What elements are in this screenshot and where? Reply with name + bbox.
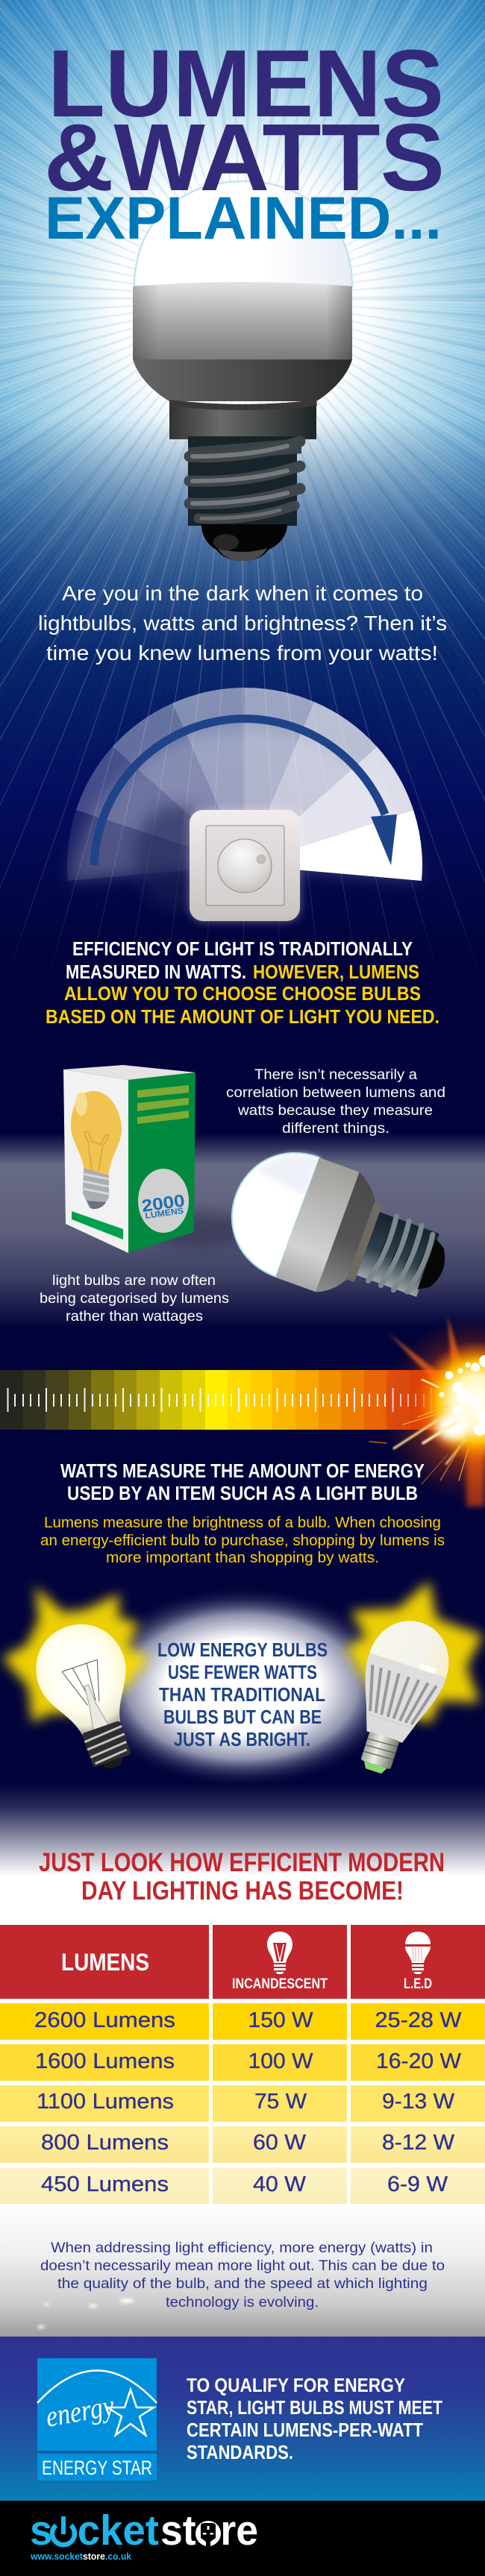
power icon in the o xyxy=(49,2516,78,2548)
grey panel with text xyxy=(0,2204,485,2337)
title line: LUMENS: LUMENS xyxy=(48,31,444,137)
row: 2600 lumens xyxy=(0,2003,485,2040)
paragraph: doesn’t necessarily mean more light out. This can be due to xyxy=(40,2258,445,2274)
stem xyxy=(78,1683,109,1731)
sparkles xyxy=(1,2240,134,2328)
low energy text: USE FEWER WATTS xyxy=(168,1661,317,1683)
box top face xyxy=(63,1065,195,1080)
glass xyxy=(24,1612,143,1743)
box badge: LUMENS xyxy=(145,1207,184,1221)
footer xyxy=(0,2501,485,2576)
correlation text: correlation between lumens and xyxy=(226,1085,445,1101)
explosion core xyxy=(416,1341,485,1463)
lumens explanation text: an energy-efficient bulb to purchase, shopping by lumens is xyxy=(40,1533,445,1549)
low energy text: LOW ENERGY BULBS xyxy=(157,1639,328,1661)
intro text xyxy=(38,582,447,665)
fan wedges xyxy=(67,688,422,881)
efficiency heading: ALLOW YOU TO CHOOSE CHOOSE BULBS xyxy=(64,982,421,1005)
row: 1100 lumens: 75 W xyxy=(254,2090,307,2114)
row: 450 lumens: 450 Lumens xyxy=(41,2173,169,2196)
paragraph: When addressing light efficiency, more energy (watts) in xyxy=(51,2240,433,2256)
fan glow xyxy=(69,729,421,881)
website: www.socket xyxy=(30,2551,84,2562)
efficiency heading: EFFICIENCY OF LIGHT IS TRADITIONALLY xyxy=(72,937,413,960)
floor bulb grey band xyxy=(276,1157,360,1292)
correlation text xyxy=(226,1067,445,1137)
background: light burst with rays xyxy=(0,0,485,970)
floor bulb collar xyxy=(346,1202,382,1282)
efficiency heading: HOWEVER, LUMENS xyxy=(253,961,419,983)
floor bulb taper xyxy=(316,1172,383,1301)
energy star text xyxy=(187,2374,442,2463)
dimmer switch xyxy=(190,810,300,921)
blue energy star panel xyxy=(0,2337,485,2501)
efficiency heading: MEASURED IN WATTS. xyxy=(66,961,246,983)
dial arrow xyxy=(94,719,397,865)
energy star logo xyxy=(37,2358,157,2481)
white table background xyxy=(0,1876,485,2208)
table xyxy=(0,1925,485,2205)
low energy text: BULBS BUT CAN BE xyxy=(163,1706,322,1728)
tip xyxy=(362,1761,387,1775)
energy star logo: ENERGY STAR xyxy=(42,2457,152,2479)
efficiency heading: BASED ON THE AMOUNT OF LIGHT YOU NEED. xyxy=(46,1005,439,1028)
row: 2600 lumens: 150 W xyxy=(248,2008,313,2032)
row: 1100 lumens xyxy=(0,2085,485,2122)
watts heading: WATTS MEASURE THE AMOUNT OF ENERGY xyxy=(60,1460,425,1482)
spectrum tick marks xyxy=(7,1388,448,1412)
floor bulb dome xyxy=(214,1135,319,1277)
bulb grey band xyxy=(133,282,352,359)
yellow glow left xyxy=(2,1586,149,1723)
header: LED: L.E.D xyxy=(404,1976,432,1992)
fade to white band xyxy=(0,1785,485,1878)
website: store xyxy=(83,2551,105,2562)
row: 800 lumens: 800 Lumens xyxy=(41,2131,169,2155)
illustration: large LED bulb xyxy=(133,181,352,561)
red heading: DAY LIGHTING HAS BECOME! xyxy=(81,1876,404,1906)
floor bulb screw xyxy=(356,1210,440,1298)
row: 2600 lumens: 25-28 W xyxy=(375,2008,462,2032)
row: 450 lumens: 6-9 W xyxy=(387,2173,448,2196)
efficiency heading xyxy=(46,937,439,1028)
logo wordmark: socket xyxy=(30,2507,159,2554)
logo wordmark: store xyxy=(160,2507,258,2554)
red heading xyxy=(39,1848,445,1906)
website: .co.uk xyxy=(105,2551,131,2562)
correlation text: watts because they measure xyxy=(237,1103,433,1119)
website xyxy=(30,2551,131,2562)
incandescent bulb xyxy=(24,1612,157,1782)
energy star text: STANDARDS. xyxy=(187,2441,293,2463)
header: incandescent: INCANDESCENT xyxy=(232,1976,328,1992)
explosion soft rays xyxy=(388,1316,464,1389)
bulb dome xyxy=(134,181,352,286)
title line: EXPLAINED: EXPLAINED... xyxy=(45,185,442,252)
base collar xyxy=(361,1713,413,1744)
row: 1100 lumens: 1100 Lumens xyxy=(37,2090,174,2114)
row: 1600 lumens xyxy=(0,2044,485,2081)
row: 1600 lumens: 16-20 W xyxy=(376,2049,462,2073)
categorised text: rather than wattages xyxy=(66,1309,203,1325)
icon: LED bulb xyxy=(405,1932,431,1974)
dimmer dial with fan segments and arrow xyxy=(67,688,422,921)
background: dark page base xyxy=(0,0,485,1879)
box bottom green stripe xyxy=(72,1211,123,1240)
lumens explanation text: more important than shopping by watts. xyxy=(106,1550,379,1566)
filament xyxy=(62,1659,110,1710)
paragraph xyxy=(40,2240,445,2310)
explosion streaks xyxy=(369,1380,470,1484)
energy star logo: energy xyxy=(43,2389,116,2434)
intro text: lightbulbs, watts and brightness? Then it’s xyxy=(38,612,447,635)
shadow on left of switch xyxy=(134,805,216,910)
logo wordmark xyxy=(30,2507,258,2554)
floor band xyxy=(0,1134,485,1328)
row: 800 lumens xyxy=(0,2126,485,2163)
central white glow xyxy=(82,1586,403,1788)
header: lumens: LUMENS xyxy=(61,1949,149,1976)
explosion sparks xyxy=(439,1355,485,1436)
categorised text: light bulbs are now often xyxy=(52,1273,216,1289)
row: 800 lumens: 60 W xyxy=(253,2131,307,2155)
explosion spark at bar end xyxy=(369,1316,485,1507)
paragraph: technology is evolving. xyxy=(166,2294,319,2310)
box left face xyxy=(63,1069,128,1253)
intro text: Are you in the dark when it comes to xyxy=(62,582,423,605)
title line: & WATTS: &WATTS xyxy=(44,104,445,211)
title xyxy=(44,31,445,252)
row: 1600 lumens: 1600 Lumens xyxy=(35,2049,175,2073)
floor bulb tip xyxy=(418,1239,452,1295)
correlation text: There isn’t necessarily a xyxy=(254,1067,417,1083)
box stripes xyxy=(137,1085,189,1124)
lumens explanation text xyxy=(40,1515,445,1566)
yellow glow right xyxy=(345,1581,483,1723)
box green face xyxy=(128,1072,195,1253)
row: 2600 lumens: 2600 Lumens xyxy=(34,2008,175,2032)
bulb tip xyxy=(201,524,287,561)
icon: incandescent bulb xyxy=(267,1932,292,1974)
row: 800 lumens: 8-12 W xyxy=(382,2131,455,2155)
intro text: time you knew lumens from your watts! xyxy=(46,641,438,665)
box badge: 2000 xyxy=(140,1190,186,1216)
low energy text xyxy=(157,1639,328,1750)
bulb collar xyxy=(169,400,316,439)
watts heading xyxy=(60,1460,425,1504)
row: 1600 lumens: 100 W xyxy=(248,2049,313,2073)
low energy text: THAN TRADITIONAL xyxy=(159,1683,325,1706)
illustration: bulb on the floor xyxy=(214,1135,465,1331)
box shadow xyxy=(149,1213,254,1248)
categorised text: being categorised by lumens xyxy=(40,1291,229,1307)
row: 450 lumens: 40 W xyxy=(253,2173,307,2196)
box bulb icon xyxy=(71,1091,122,1209)
lumens explanation text: Lumens measure the brightness of a bulb. When choosing xyxy=(44,1515,441,1531)
band and fins xyxy=(351,1653,446,1733)
bulb screw thread xyxy=(188,436,301,526)
explosion outer glow xyxy=(381,1316,485,1503)
row: 1100 lumens: 9-13 W xyxy=(382,2090,455,2114)
box badge xyxy=(138,1169,189,1233)
illustration: product box xyxy=(63,1065,254,1253)
paragraph: the quality of the bulb, and the speed at which lighting xyxy=(57,2275,428,2292)
screw xyxy=(360,1732,400,1770)
energy star text: TO QUALIFY FOR ENERGY xyxy=(187,2374,405,2396)
low energy text: JUST AS BRIGHT. xyxy=(174,1728,310,1750)
table header xyxy=(0,1925,485,1999)
correlation text: different things. xyxy=(282,1121,389,1137)
colour spectrum bar xyxy=(0,1370,485,1430)
categorised text xyxy=(40,1273,229,1325)
glowing section xyxy=(2,1581,483,1788)
explosion orange drop at right edge xyxy=(466,1428,485,1507)
plug icon in the o xyxy=(195,2521,221,2546)
row: 450 lumens xyxy=(0,2167,485,2205)
dome xyxy=(369,1610,460,1678)
screw xyxy=(82,1721,131,1768)
bulb dark lower band xyxy=(133,359,352,401)
watts heading: USED BY AN ITEM SUCH AS A LIGHT BULB xyxy=(67,1482,418,1504)
energy star text: CERTAIN LUMENS-PER-WATT xyxy=(187,2419,423,2441)
LED bulb xyxy=(335,1610,460,1783)
